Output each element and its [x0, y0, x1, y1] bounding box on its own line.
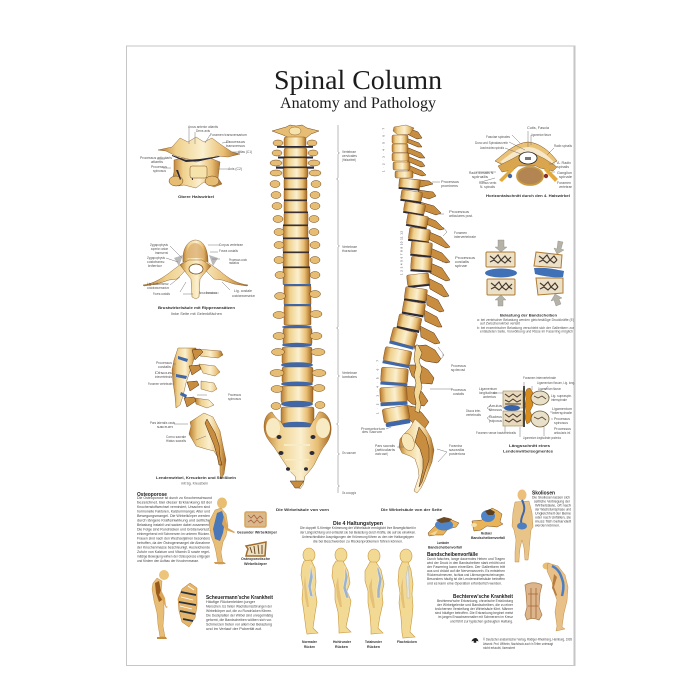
text block: Bechterew'sche Erkrankung, chronische Entzündung: [437, 599, 513, 603]
text block: [427, 557, 505, 586]
text block: Belastung instabil und sacken dabei zusammen.: [137, 523, 210, 527]
caption: normal back: [302, 639, 317, 649]
labels: intervertebrale: [454, 235, 476, 239]
labels: Processus: [554, 427, 571, 431]
labels: Axis (C2): [228, 167, 242, 171]
labels: costalis: [455, 260, 470, 264]
labels: spinalis: [557, 165, 569, 169]
figure: lateral disc herniation: [428, 517, 459, 536]
title: Spinal Column: [274, 65, 443, 95]
text block: Knochenstoffwechsel vermindert, Ursachen sind: [137, 505, 210, 509]
text block: muss früh behandelt: [535, 520, 571, 524]
labels: Ligamentum: [479, 387, 497, 391]
panel: scoliosis: [512, 490, 571, 562]
labels: Cutis, Fascia: [527, 126, 549, 130]
labels: Ligamentum longitudinale posterius: [523, 436, 561, 440]
text block: Die Skoliosen lassen sich: [532, 496, 570, 500]
leader lines: [157, 128, 240, 169]
labels: interspinale: [551, 398, 567, 402]
figure: medial disc herniation: [471, 508, 503, 531]
panel: disc loading: [477, 240, 575, 334]
leader lines: [476, 131, 555, 182]
text block: wird der Druck in den Bandscheiben stark erhöht und: [427, 561, 505, 565]
labels: Fovea costalis: [219, 249, 238, 253]
labels: Discus inter-: [466, 409, 481, 413]
text block: Die doppelt S-förmige Krümmung der Wirbelsäule ermöglicht ihre Beweglichkeit in: [300, 526, 416, 530]
caption: Lendenwirbelsegmentes: [503, 448, 554, 454]
text block: Ungleichheit der Beine: [535, 512, 571, 516]
copyright text: © Deutscher anatomischer Verlag, Rüdiger-Rheinberg, Hamburg, 1993: [483, 638, 572, 642]
text block: werden können.: [535, 524, 560, 528]
labels: Pars lateralis ossis: [150, 421, 175, 425]
labels: (articularis: [375, 448, 396, 452]
figure: round back: [365, 549, 384, 634]
thoracic vertebrae: [270, 178, 322, 325]
labels: Processus articularis: [140, 156, 172, 160]
figure: flat back: [398, 549, 415, 638]
text block: und es kann eine Operation erforderlich werden.: [427, 582, 502, 586]
panel: longitudinal section lumbar segment: [466, 376, 575, 454]
text block: [435, 599, 514, 624]
lumbar segments: [380, 327, 441, 428]
labels: costalis: [158, 365, 171, 369]
text block: die bei Beschwerden zu Rückenproblemen führen können.: [313, 540, 403, 544]
text block: Wirbelkörper auf, die zu Rundrücken führen.: [206, 609, 272, 613]
caption: medial disc herniation: Medialer: [481, 530, 492, 536]
text block: Wirbelsäule, oft nach: [535, 504, 571, 508]
labels: interspinale: [552, 411, 572, 415]
labels: Processus: [228, 393, 241, 397]
caption: [158, 305, 236, 316]
cervical segments: [392, 125, 426, 178]
labels: [148, 361, 241, 443]
panel: Bechterew disease: [435, 562, 568, 631]
caption: lateral disc herniation: Lumbaler: [437, 540, 449, 545]
vertebra numbering, thoracic: 1 2 3 4 5 6 7 8 9 10 11 12: [400, 231, 404, 275]
text block: durch längere Krafteinwirkung und seitliche: [137, 518, 210, 522]
labels: N. spinalis: [480, 185, 495, 189]
caption: normal back: Normaler: [302, 639, 317, 644]
panel: Scheuermann disease: [152, 570, 273, 639]
labels: sacrum: [157, 425, 174, 429]
labels: Fovea costalis: [153, 292, 170, 296]
chart: spinal column front view: [264, 125, 331, 489]
labels: Processus: [441, 180, 459, 184]
labels: superior costae: [151, 247, 168, 251]
thoracic bodies and discs: [396, 178, 433, 333]
text block: Unterschiedliche Ausprägungen der Krümmung führen zu den vier Haltungstypen: [302, 535, 414, 539]
region brackets with labels: Os coccygis: [342, 491, 356, 495]
panel: four posture types: [300, 521, 417, 649]
vertebra numbering, cervical: 1 · 2 · 3 · 4 · 5 · 6 · 7: [382, 128, 386, 172]
heading: Osteoporose: [137, 492, 167, 498]
heading: Scheuermann'sche Krankheit: [206, 595, 273, 601]
text block: geformt, die Bandscheiben wölben sich vor.: [206, 618, 272, 622]
text block: Zufuhr von Kalzium und Vitamin D sowie regel-: [137, 550, 211, 554]
caption: Belastung der Bandscheiben: [500, 312, 558, 318]
text block: der Wirbelgelenke und Bandscheiben, die zu einer: [437, 603, 514, 607]
labels: Radix spinalis: [554, 144, 572, 148]
labels: spinosus: [228, 397, 241, 401]
caption: hollow round back: Rücken: [335, 644, 348, 649]
text block: hormonelle Faktoren, Kalziummangel, Alter und: [137, 510, 210, 514]
labels: Fasciae spinales: [486, 135, 510, 139]
panel: horizontal section through C4: [469, 126, 572, 198]
text block: mäßige Bewegung wirken der Osteoporose entgegen: [137, 554, 210, 558]
thoracic spinous processes: [412, 179, 450, 344]
heading: Bechterew'sche Krankheit: [453, 594, 513, 600]
labels: Lig. costotransv.: [147, 282, 169, 286]
labels: Processus: [449, 210, 470, 214]
region brackets with labels: thoracicae: [342, 249, 357, 253]
copyright text: nicht erlaubt, lizenziert: [483, 646, 515, 650]
labels: [140, 125, 252, 173]
labels: Foramen venae basivertebralis: [476, 431, 516, 435]
labels: transversi: [155, 251, 168, 255]
leader lines: [487, 382, 553, 437]
text block: Rückenschmerzen, Ischias und Lähmungserscheinungen.: [427, 573, 505, 577]
labels: Processus: [226, 140, 246, 144]
labels: fibrosus: [489, 408, 502, 412]
heading: Skoliosen: [532, 490, 555, 496]
labels: Hiatus sacralis: [166, 439, 186, 443]
text block: Besonders häufig ist die Lendenwirbelsäule betroffen: [427, 577, 505, 581]
labels: Atlas (C1): [238, 150, 252, 154]
text block: oder nach Unfällen, sie: [535, 516, 571, 520]
labels: Processus: [455, 256, 476, 260]
caption: osteoporotic vertebra: [241, 556, 271, 566]
labels: Foramen intervertebrale: [523, 376, 556, 380]
text block: Die Folge sind Rundrücken und Größenverlust,: [137, 528, 210, 532]
labels: Processus: [451, 388, 466, 392]
labels: Nucleus: [489, 415, 502, 419]
caption: [477, 312, 575, 334]
text block: betroffen, da der Östrogenmangel die Abnahme: [137, 541, 210, 545]
caption: a: bei zentrischer Belastung werden gleichmäßige Druckkräfte (E): [477, 318, 574, 322]
heading: Bandscheibenvorfälle: [427, 552, 478, 558]
labels: spinae: [455, 264, 467, 268]
panel: herniated discs: [427, 508, 505, 586]
text block: knöchernen Versteifung der Wirbelsäule führt. Männer: [435, 607, 514, 611]
labels: des Sacrum: [362, 430, 382, 434]
labels: Promontorium: [361, 427, 385, 431]
leader lines: [172, 364, 207, 440]
labels: Ligamentum flavum: [538, 387, 561, 391]
sacrum and coccyx: [264, 412, 331, 489]
text block: und fördern den Aufbau der Knochenmasse.: [137, 559, 199, 563]
labels: A. Radix: [557, 161, 571, 165]
text block: Schmerzen treten vor allem bei Belastung: [206, 622, 272, 626]
labels: [147, 243, 255, 298]
labels: Foramina: [449, 444, 462, 448]
labels: [466, 376, 575, 440]
labels: Processus costo: [229, 258, 247, 262]
labels: Zygapophysis: [150, 243, 168, 247]
labels: costalis: [453, 392, 464, 396]
caption: hollow round back: Hohlrunder: [333, 639, 351, 644]
icon: arrows down: [495, 240, 564, 254]
labels: Processus: [156, 361, 172, 365]
heading: Die 4 Haltungstypen: [333, 521, 383, 527]
region brackets with labels: lumbales: [342, 375, 357, 379]
publisher logo: [472, 638, 478, 642]
labels: Foramen vertebrale: [148, 382, 172, 386]
text block: Die Osteoporose ist durch zu Knochenschwund: [137, 496, 212, 500]
caption: auf Zwischenwirbel verteilt: [480, 322, 520, 326]
caption: [156, 475, 237, 486]
illustration: sacrum and coccyx: [189, 413, 226, 479]
region brackets with labels: (Halswirbel): [342, 158, 356, 162]
illustration: thoracic vertebra: [143, 240, 248, 299]
text block: der Wachstumsphase und: [535, 508, 571, 512]
leader lines: [386, 182, 452, 462]
leader lines: [166, 245, 230, 294]
figure: normal back: [301, 548, 318, 634]
region brackets with labels: Vertebrae: [342, 371, 357, 375]
labels: prominens: [441, 184, 458, 188]
text block: Die Deckplatten der Wirbel sind unregelmäßig: [206, 614, 273, 618]
labels: Ganglion: [557, 171, 572, 175]
region brackets with labels: cervicales: [342, 154, 357, 158]
labels: spinosus: [554, 421, 568, 425]
panel: upper cervical vertebrae: [140, 125, 252, 199]
text block: [206, 600, 273, 631]
figure: osteoporotic vertebra: [246, 542, 266, 556]
labels: Dura und Spinalwurzeln: [475, 141, 508, 145]
text block: Menschen. Es treten Wachstumsstörungen der: [206, 604, 273, 608]
text block: sind häufiger betroffen. Die Erkrankung beginnt meist: [435, 611, 513, 615]
caption: b: bei exzentrischer Belastung verschiebt sich der Gallertkern zur: [477, 326, 575, 330]
subtitle: Anatomy and Pathology: [280, 95, 436, 112]
figure: hollow round back: [332, 548, 351, 633]
caption: round back: Rücken: [367, 644, 380, 649]
text block: Häufige Rückenleiden junger: [206, 600, 256, 604]
text block: aus und drückt auf die Nervenwurzeln. Es entstehen: [427, 569, 505, 573]
labels: Ligamentum: [552, 407, 572, 411]
text block: und führt zur typischen gebeugten Haltung.: [450, 620, 513, 624]
labels: vertebralis: [466, 413, 481, 417]
caption: osteoporotic vertebra: Osteoporotische: [241, 556, 271, 561]
labels: Radix dorsalis N.: [469, 171, 494, 175]
caption: hollow round back: [333, 639, 351, 649]
panel: osteoporosis: [137, 492, 277, 566]
labels: anterius: [483, 395, 496, 399]
labels: Anulus: [489, 404, 503, 408]
caption: Lendenwirbel, Kreuzbein und Steißbein: [156, 475, 237, 480]
labels: pulposus: [489, 419, 502, 423]
illustration: eccentric load: [534, 252, 564, 295]
labels: Ligamentum flavum: [531, 133, 551, 137]
text block: [532, 496, 571, 528]
caption: front view: Die Wirbelsäule von vorn: [276, 507, 330, 512]
illustration: atlas and axis: [158, 137, 240, 188]
figure: fused vertebrae: [525, 583, 542, 620]
region brackets with labels: [336, 125, 357, 495]
figure: person with osteoporosis: [209, 498, 235, 564]
labels: Zygapophysis: [147, 256, 165, 260]
caption: Brustwirbelsäule mit Rippenansätzen: [158, 305, 236, 310]
labels: Discus: [155, 371, 173, 375]
labels: Lig. supraspin.: [551, 394, 572, 398]
caption: round back: [365, 639, 382, 649]
labels: intervertebralis: [155, 375, 172, 379]
text block: seitliche Verbiegung der: [534, 500, 571, 504]
labels: spinale: [559, 175, 572, 179]
caption: lateral disc herniation: Bandscheibenvorfall: [428, 544, 462, 550]
text block: Frauen sind nach den Wechseljahren besonders: [137, 536, 210, 540]
icon: arrows up: [495, 294, 562, 306]
text block: [300, 526, 416, 544]
text block: einhergehend mit Schmerzen im unteren Rücken.: [137, 532, 210, 536]
caption: linke Seite mit Gelenkflächen: [171, 312, 222, 316]
caption: entlasteten Seite, Vorwölbung und Risse im Faserring möglich: [480, 330, 573, 334]
caption: Längsschnitt eines: [509, 443, 551, 448]
caption: osteoporotic vertebra: Wirbelkörper: [244, 561, 267, 566]
labels: radiatus: [229, 261, 239, 265]
caption: Horizontalschnitt durch den 4. Halswirbel: [486, 193, 570, 198]
labels: Ramus ventr.: [479, 181, 497, 185]
labels: spinalis: [472, 175, 489, 179]
labels: longitudinale: [479, 391, 497, 395]
figure: bent person: [542, 562, 568, 631]
caption: Obere Halswirbel: [178, 194, 214, 199]
panel: thoracic vertebra with ribs: [143, 240, 255, 316]
region brackets with labels: Os sacrum: [342, 451, 356, 455]
illustration: lumbar side view: [172, 348, 226, 479]
text block: der Längsrichtung und entlastet sie bei Belastung durch Kräfte, die auf sie einwirken.: [300, 530, 416, 534]
region brackets with labels: Vertebrae: [342, 245, 357, 249]
labels: Ligamentum flavum, Lig. long.: [537, 381, 575, 385]
labels: inferior: [148, 264, 163, 268]
labels: atlantis: [151, 160, 163, 164]
labels: spinosus: [153, 169, 166, 173]
labels: articulares post.: [449, 214, 473, 218]
labels: articularis inf.: [554, 431, 571, 435]
vertebra numbering, lumbar: 1 · 2 · 3 · 4 · 5 · 6 · 7: [376, 360, 380, 414]
chart: spinal column side view: [361, 125, 476, 493]
poster frame: [126, 46, 574, 666]
labels: costotransversarium: [147, 286, 169, 290]
lumbar vertebrae and discs: [270, 325, 326, 428]
labels: Pars sacralis: [375, 444, 395, 448]
labels: sacralia: [449, 448, 464, 452]
figure: healthy vertebra: [245, 512, 266, 527]
region brackets with labels: Vertebrae: [342, 150, 356, 154]
labels: costotransversarium: [232, 294, 255, 298]
labels: Arachnoidea spinalis: [480, 146, 504, 150]
labels: posteriora: [449, 452, 465, 456]
labels: Arcus anterior atlantis: [188, 125, 218, 129]
labels: vertebrae: [559, 185, 572, 189]
text block: Bewegungsmangel. Die Wirbelkörper werden: [137, 514, 210, 518]
sacrum and coccyx side: [399, 419, 434, 493]
caption: round back: Totalrunder: [365, 639, 382, 644]
caption: mit Sg. Kreuzbein: [181, 482, 208, 486]
text block: [137, 496, 213, 563]
labels: Processus: [451, 364, 466, 368]
labels: Arcus thoracicus: [199, 291, 217, 295]
caption: medial disc herniation: Bandscheibenvorfall: [471, 535, 505, 540]
caption: medial disc herniation: [471, 530, 505, 540]
caption: healthy vertebra: Gesunder Wirbelkörper: [237, 530, 277, 534]
caption: normal back: Rücken: [304, 644, 315, 649]
figure: back view with curved spine: [512, 490, 533, 562]
text block: und im Verlauf der Pubertät auf.: [206, 627, 262, 631]
labels: Processus: [151, 165, 167, 169]
illustration: section: [503, 386, 549, 427]
labels: transversus: [226, 144, 245, 148]
cervical vertebrae: [270, 125, 321, 178]
labels: Cornu sacrale: [166, 435, 186, 439]
labels: Foramen transversarium: [210, 133, 247, 137]
text block: bezeichnet. Bei dieser Erkrankung ist der: [137, 500, 213, 504]
labels: Dens axis: [196, 129, 210, 133]
illustration: central load: [485, 252, 517, 295]
labels: spinosi: [451, 368, 465, 372]
labels: [361, 180, 476, 456]
copyright text: Artwork: Prof. Wilhelm, Nachdruck auch in Teilen untersagt: [483, 642, 553, 646]
panel: lumbar vertebrae, sacrum and coccyx: [148, 348, 241, 486]
labels: ossis sacri): [375, 452, 388, 456]
illustration: section: [495, 142, 558, 185]
labels: Corpus vertebrae: [219, 243, 243, 247]
text block: der Faserring kann einreißen. Der Gallertkern tritt: [427, 565, 505, 569]
figure: person: [152, 570, 169, 639]
caption: [503, 443, 554, 454]
caption: side view: Die Wirbelsäule von der Seite: [381, 507, 443, 512]
copyright text: [483, 638, 572, 650]
labels: costotransv.: [147, 260, 165, 264]
labels: Lig. costale: [234, 289, 252, 293]
figure: curved spine segment: [178, 583, 197, 627]
text block: der Knochenmasse beschleunigt. Ausreichende: [137, 546, 210, 550]
labels: Foramen: [454, 231, 467, 235]
text block: Durch falsches, lange dauerndes Heben und Tragen: [427, 557, 505, 561]
text block: im jungen Erwachsenenalter mit Schmerzen im Kreuz: [438, 615, 513, 619]
labels: [469, 126, 572, 189]
caption: flat back: Flachrücken: [397, 639, 417, 644]
labels: Foramen: [557, 181, 571, 185]
labels: Processus: [554, 417, 570, 421]
caption: lateral disc herniation: [428, 540, 462, 550]
